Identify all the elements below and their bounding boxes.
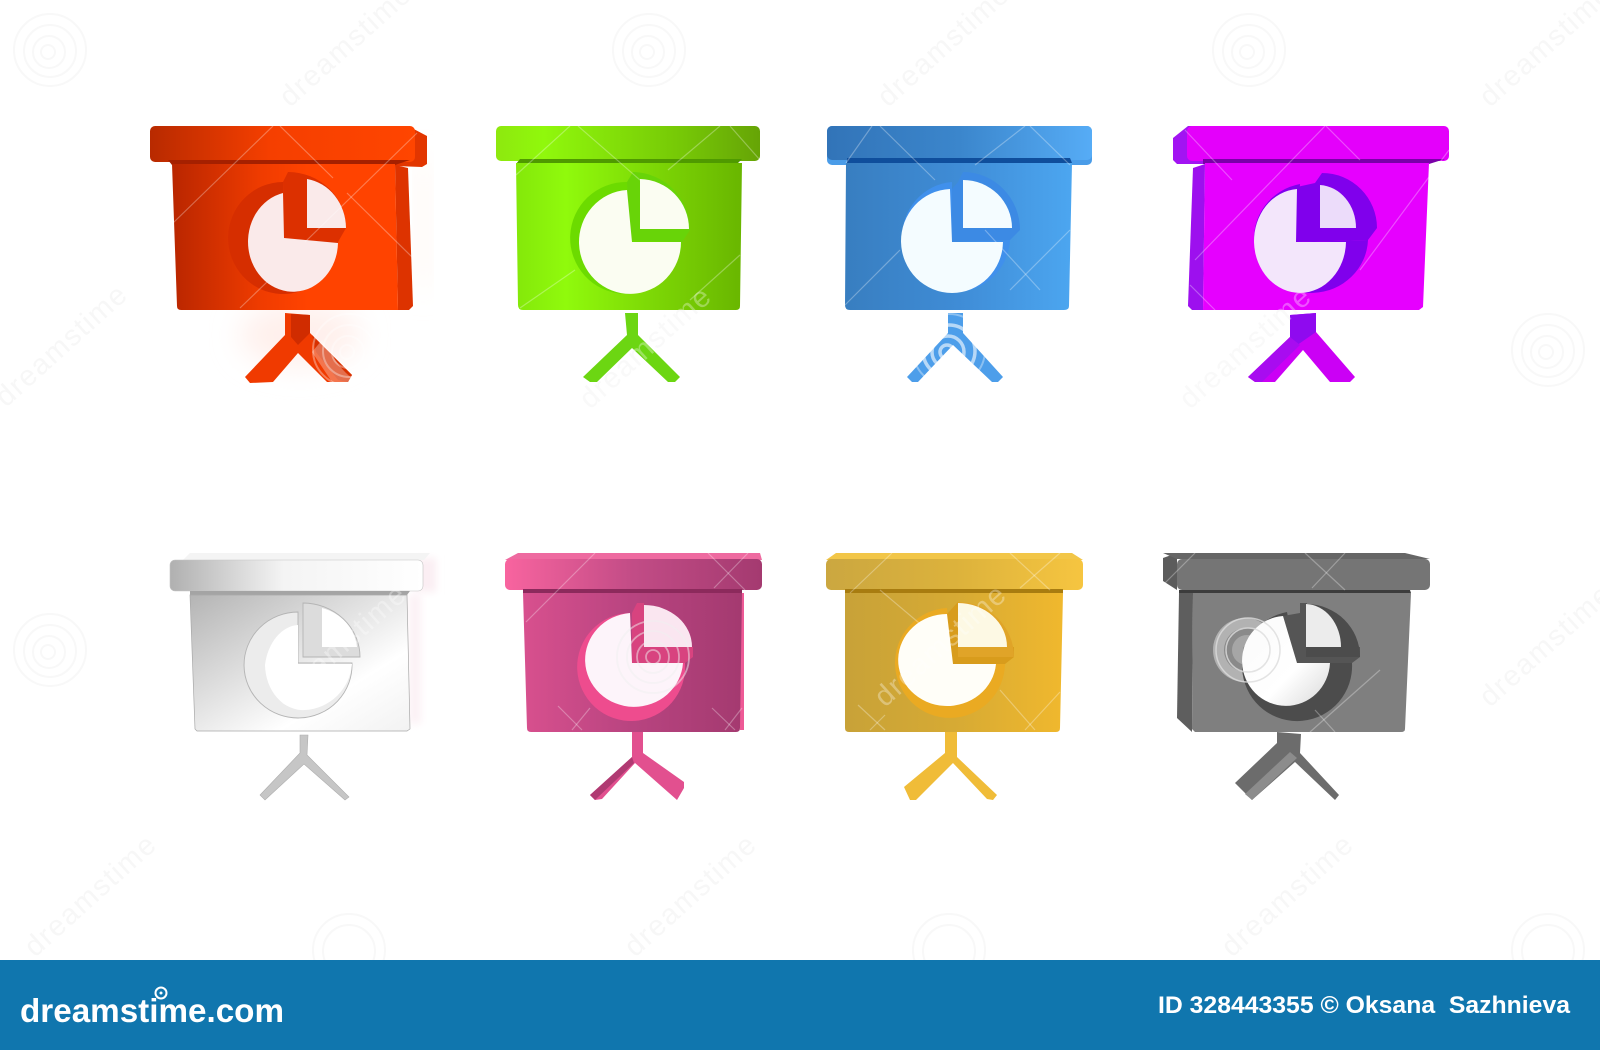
blue screen xyxy=(845,163,1072,310)
blue pie chart xyxy=(901,172,1020,293)
red screen xyxy=(172,164,413,310)
watermark layer: under icons: dreamstime xyxy=(1173,280,1318,415)
icon: pink presentation board xyxy=(505,553,762,800)
purple stand xyxy=(1248,313,1355,382)
blue cap xyxy=(827,126,1092,165)
watermark layer: under icons: dreamstime xyxy=(573,280,718,415)
purple pie chart xyxy=(1254,173,1377,293)
grey cap xyxy=(1163,553,1430,593)
gold cap xyxy=(826,553,1083,593)
pink cap xyxy=(505,553,762,593)
silver cap xyxy=(170,560,423,595)
blue stand xyxy=(907,313,1003,382)
watermark layer: under icons: dreamstime xyxy=(618,828,763,963)
green pie chart xyxy=(570,172,690,294)
silver pie chart xyxy=(244,603,360,718)
watermark overlay on icons: dreamstime xyxy=(268,578,413,713)
pink pie chart xyxy=(577,603,693,721)
watermark overlay on icons: dreamstime xyxy=(868,578,1013,713)
silver screen xyxy=(190,595,410,731)
watermark overlay on icons: dreamstime xyxy=(1173,280,1318,415)
background glows xyxy=(183,160,436,724)
watermark layer: under icons: dreamstime xyxy=(1215,828,1360,963)
purple screen xyxy=(1188,163,1429,310)
watermark overlay on icons xyxy=(173,126,1449,732)
icon: silver presentation board xyxy=(170,560,423,800)
icon: blue presentation board xyxy=(827,126,1092,382)
grey pie chart xyxy=(1216,603,1360,721)
green cap xyxy=(496,126,760,164)
red stand xyxy=(245,313,352,383)
red pie chart xyxy=(228,172,346,294)
pink screen xyxy=(523,593,744,732)
grey spiral mark on screen xyxy=(1213,618,1277,682)
gold pie chart xyxy=(895,602,1014,718)
purple cap xyxy=(1173,126,1449,164)
green stand xyxy=(583,313,680,382)
footer credit: ID 328443355 © Oksana Sazhnieva xyxy=(1158,992,1570,1019)
silver stand xyxy=(260,735,349,800)
footer logo: dreamstime.com: dreamstime.com xyxy=(20,992,284,1029)
pink stand xyxy=(590,732,684,800)
grey stand xyxy=(1235,732,1339,800)
icon: red presentation board xyxy=(150,126,427,383)
watermark layer: under icons: dreamstime xyxy=(18,828,163,963)
icon: dark grey presentation board xyxy=(1163,553,1430,800)
red cap xyxy=(150,126,427,167)
gold stand xyxy=(904,732,997,800)
watermark overlay on icons: dreamstime xyxy=(573,280,718,415)
footer bar xyxy=(0,960,1600,1050)
green screen xyxy=(516,163,742,310)
gold screen xyxy=(845,593,1063,732)
icon: green presentation board xyxy=(496,126,760,382)
icon: purple presentation board xyxy=(1173,126,1449,382)
icon: gold presentation board xyxy=(826,553,1083,800)
grey screen xyxy=(1177,593,1411,732)
